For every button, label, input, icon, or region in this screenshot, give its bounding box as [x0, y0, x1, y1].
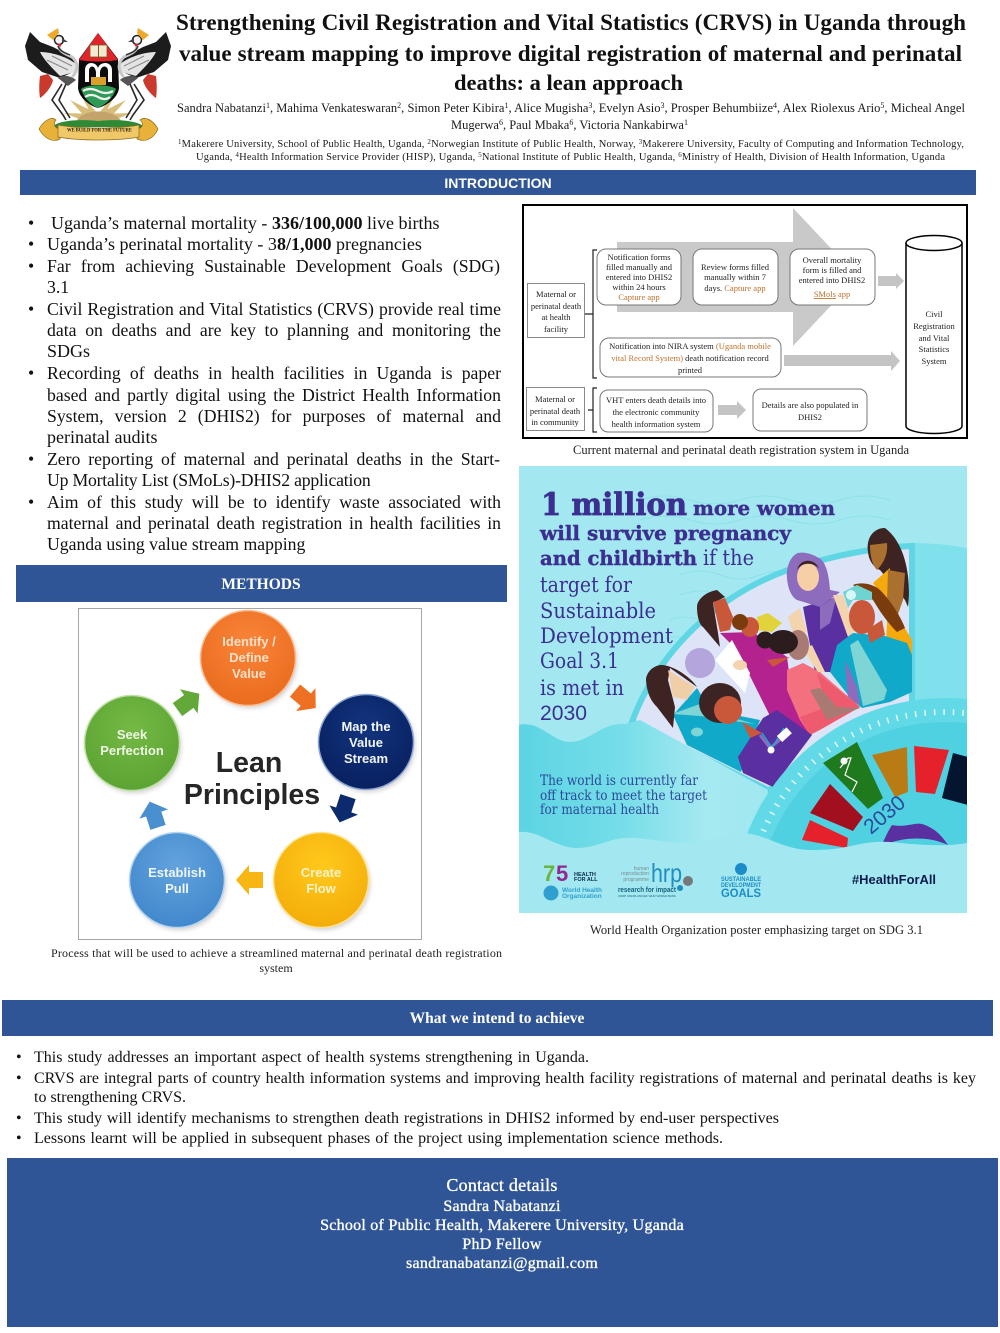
box: notification forms: within 24 hours — [612, 282, 666, 292]
logo: SDG goals: GOALS — [721, 886, 761, 900]
authors: 1 — [684, 118, 688, 127]
box: notification forms: Capture app — [618, 292, 660, 302]
logo: WHO 75: HEALTH — [574, 872, 596, 878]
headline text: more women — [693, 496, 835, 520]
icon: sun rays — [64, 93, 132, 120]
box: overall mortality: form is filled and — [803, 265, 862, 275]
authors: , Paul Mbaka — [503, 118, 570, 132]
text block: introduction bullets: maternal and perinatal death registration in health facilities in — [47, 513, 501, 533]
box: notification forms: Notification forms — [607, 252, 671, 262]
box: facility death: at health — [541, 312, 571, 322]
heading: introduction: INTRODUCTION — [444, 175, 552, 191]
circle: identify define value: Value — [232, 666, 266, 681]
text block: aims bullets: This study addresses an important aspect of health systems strengthening in Uganda. — [34, 1049, 589, 1066]
logo: HRP: human — [634, 866, 649, 872]
text block: aims bullets: CRVS are integral parts of country health information systems and improving health facility registrations of maternal and perinatal deaths is key — [34, 1070, 976, 1087]
box: facility death: Maternal or — [536, 289, 576, 299]
logo: HRP: reproduction — [621, 871, 649, 877]
logo: WHO 75: FOR ALL — [574, 877, 598, 883]
circle: create flow — [274, 832, 370, 930]
woman: orange dress — [868, 528, 912, 668]
box: overall mortality — [790, 249, 875, 305]
authors: , Victoria Nankabirwa — [573, 118, 684, 132]
box: community death: in community — [531, 417, 579, 427]
arrow: VHT to DHIS2 — [718, 401, 746, 419]
headline text — [539, 487, 835, 725]
wave band — [519, 720, 768, 860]
text block: introduction bullets: SDGs — [47, 341, 90, 361]
box: details populated — [753, 389, 867, 431]
text block: introduction bullets — [28, 213, 501, 554]
title: value stream mapping to improve digital registration of maternal and perinatal — [179, 40, 962, 66]
box: NIRA notification — [600, 338, 781, 377]
segment: red — [914, 746, 949, 794]
text block: introduction bullets: • — [28, 213, 34, 233]
affiliations: 6 — [678, 151, 682, 159]
box: notification forms: filled manually and — [606, 262, 673, 272]
logo: WHO 75: Organization — [562, 893, 602, 900]
arrow: NIRA to CRVS — [784, 351, 900, 371]
bracket: community — [588, 388, 597, 432]
text block: introduction bullets: based and partly digital using the District Health Information — [47, 385, 501, 405]
text block: introduction bullets: Zero reporting of maternal and perinatal deaths in the Start- — [47, 449, 500, 469]
box: facility death — [528, 284, 584, 338]
authors: , Micheal Angel — [884, 101, 966, 115]
cylinder: CRVS: System — [921, 356, 947, 366]
icon: arrow green — [169, 682, 208, 722]
box: NIRA notification: printed — [678, 365, 703, 375]
icon: grass — [50, 120, 147, 129]
circle: establish pull: Pull — [165, 881, 189, 896]
caption: WHO poster: World Health Organization poster emphasizing target on SDG 3.1 — [590, 923, 923, 937]
affiliations — [178, 138, 964, 163]
text block: introduction bullets: Far from achieving Sustainable Development Goals (SDG) — [47, 256, 500, 276]
label: lean principles — [184, 747, 320, 811]
text block: introduction bullets: Uganda using value stream mapping — [47, 534, 305, 554]
logo: WHO 75 — [544, 866, 602, 900]
authors: Sandra Nabatanzi — [177, 101, 266, 115]
caption: registration system: Current maternal and perinatal death registration system in Uganda — [573, 443, 909, 457]
cylinder: CRVS — [906, 236, 962, 434]
authors: , Alice Mugisha — [508, 101, 589, 115]
circle: map the value stream: Stream — [344, 751, 388, 766]
authors — [177, 101, 966, 132]
box: community death: perinatal death — [530, 406, 581, 416]
logo: WHO 75: 5 — [556, 861, 568, 886]
arrow: overall to CRVS — [878, 273, 904, 289]
subtext — [540, 774, 707, 814]
box: details populated: Details are also populated in — [762, 400, 859, 410]
panel: contact details: Sandra Nabatanzi — [443, 1198, 561, 1215]
box: review forms — [693, 249, 778, 305]
panel: contact details — [7, 1158, 998, 1327]
title: Strengthening Civil Registration and Vital Statistics (CRVS) in Uganda through — [176, 9, 966, 35]
authors: , Mahima Venkateswaran — [270, 101, 398, 115]
label: lean principles: Principles — [184, 779, 320, 811]
authors: 1 — [504, 101, 508, 110]
panel: contact details: Contact details — [446, 1175, 558, 1195]
affiliations: 2 — [427, 138, 431, 146]
shape: purple swoosh — [883, 824, 948, 845]
logo: HRP — [618, 863, 693, 897]
circle: establish pull — [130, 832, 226, 930]
box: community death — [526, 388, 584, 430]
icon: right crowned crane — [118, 28, 171, 120]
heading: methods — [16, 565, 507, 602]
authors: , Simon Peter Kibira — [401, 101, 505, 115]
circle: create flow: Flow — [306, 881, 337, 896]
illustration: women group — [646, 528, 912, 787]
logo: SDG goals: DEVELOPMENT — [721, 882, 761, 889]
affiliations: 1 — [178, 138, 182, 146]
box: VHT: the electronic community — [613, 407, 700, 417]
circle: map the value stream: Value — [349, 735, 383, 750]
authors: , Evelyn Asio — [592, 101, 660, 115]
authors: 6 — [569, 118, 573, 127]
subtext: for maternal health — [540, 802, 659, 818]
authors: 1 — [266, 101, 270, 110]
logo: HRP: UNDP UNFPA UNICEF WHO WORLD BANK — [618, 894, 676, 898]
headline text: will survive pregnancy — [539, 521, 792, 545]
heading: what we intend to achieve: What we intend to achieve — [410, 1010, 585, 1027]
circle: identify define value: Define — [229, 650, 269, 665]
circle: map the value stream — [318, 694, 415, 792]
authors: 2 — [397, 101, 401, 110]
headline text: if the — [703, 546, 754, 570]
segment: red — [802, 820, 848, 848]
segment: ochre — [872, 747, 908, 797]
text block: introduction bullets: data on deaths and are key to planning and monitoring the — [47, 320, 501, 340]
authors: , Alex Riolexus Ario — [777, 101, 880, 115]
gauge dial — [748, 698, 967, 850]
affiliations: Health Information Service Provider (HISP), Uganda, — [239, 152, 478, 163]
affiliations: 5 — [478, 151, 482, 159]
icon: motto scroll — [39, 118, 158, 140]
affiliations: 3 — [639, 138, 643, 146]
text block: introduction bullets: Civil Registration and Vital Statistics (CRVS) provide real time — [47, 299, 501, 319]
woman: purple hijab — [787, 553, 855, 672]
text block: introduction bullets: 3.1 — [47, 277, 69, 297]
cylinder: CRVS: and Vital — [919, 333, 950, 343]
panel: contact details: School of Public Health, Makerere University, Uganda — [320, 1217, 684, 1234]
segment: dark red — [810, 784, 863, 831]
icon: arrow yellow — [236, 865, 263, 895]
headline text: Goal 3.1 — [540, 649, 619, 673]
panel: contact details: sandranabatanzi@gmail.com — [406, 1255, 598, 1272]
label: lean principles: Lean — [216, 747, 282, 779]
cylinder: CRVS: Statistics — [919, 344, 949, 354]
affiliations: National Institute of Public Health, Uganda, — [482, 152, 678, 163]
logo: HRP: hrp — [651, 858, 682, 888]
caption: lean process: Process that will be used to achieve a streamlined maternal and perinatal death registration — [51, 946, 502, 960]
text block: aims bullets: • — [16, 1070, 22, 1087]
text block: introduction bullets: • — [28, 299, 34, 319]
text block: introduction bullets: • — [28, 234, 34, 254]
heading: what we intend to achieve — [2, 1000, 993, 1036]
headline text: 2030 — [540, 702, 587, 725]
box: NIRA notification: vital Record System) death notification record — [611, 353, 769, 363]
text block: introduction bullets: System, version 2 (DHIS2) for purposes of maternal and — [47, 406, 501, 426]
text block: introduction bullets: Uganda’s maternal mortality - 336/100,000 live births — [51, 213, 439, 233]
box: overall mortality: SMols app — [814, 289, 850, 299]
affiliations: 4 — [235, 151, 239, 159]
text block: aims bullets: This study will identify mechanisms to strengthen death registrations in DHIS2 informed by end-user perspectives — [34, 1110, 779, 1127]
box: community death: Maternal or — [535, 394, 575, 404]
affiliations: Ministry of Health, Division of Health Information, Uganda — [682, 152, 945, 163]
arrow: big grey process arrow — [617, 208, 858, 346]
text block: aims bullets: to strengthening CRVS. — [34, 1089, 186, 1106]
box: notification forms — [597, 249, 681, 305]
icon: arrow navy — [325, 792, 362, 827]
woman: coral dress — [756, 630, 860, 735]
box: facility death: facility — [544, 324, 569, 334]
woman: nurse — [830, 583, 912, 708]
poster: WHO SDG 3.1 — [519, 466, 967, 913]
segment: green heartbeat — [823, 742, 883, 809]
text block: aims bullets: • — [16, 1110, 22, 1127]
text block: introduction bullets: perinatal audits — [47, 427, 157, 447]
text block: aims bullets: • — [16, 1049, 22, 1066]
headline text: 1 million — [541, 487, 687, 523]
text block: introduction bullets: • — [28, 363, 34, 383]
text block: introduction bullets: Uganda’s perinatal mortality - 38/1,000 pregnancies — [47, 234, 422, 254]
caption: lean process: system — [259, 961, 293, 975]
icon: left crowned crane — [25, 28, 78, 120]
authors: 4 — [773, 101, 777, 110]
title: deaths: a lean approach — [454, 70, 683, 95]
affiliations: Norwegian Institute of Public Health, Norway, — [431, 139, 638, 150]
headline text: and childbirth — [540, 546, 697, 570]
hashtag: #HealthForAll — [852, 873, 936, 887]
diagram: lean principles — [78, 608, 422, 940]
circle: seek perfection — [84, 696, 181, 793]
box: VHT: health information system — [612, 419, 701, 429]
figure: doctor — [699, 683, 812, 787]
authors: Mugerwa — [451, 118, 499, 132]
flow diagram: registration system — [523, 205, 967, 438]
text block: introduction bullets: • — [28, 256, 34, 276]
caption: lean process — [51, 946, 502, 975]
title — [176, 9, 966, 95]
text block: aims bullets: • — [16, 1130, 22, 1147]
circle: create flow: Create — [301, 865, 341, 880]
woman: magenta with baby — [685, 590, 812, 735]
logo: Makerere University crest — [25, 28, 171, 140]
heading: methods: METHODS — [221, 576, 301, 593]
logo: SDG goals — [721, 863, 762, 900]
bottom wave — [519, 832, 967, 913]
icon: arrow orange — [285, 679, 325, 719]
box: overall mortality: Overall mortality — [803, 255, 862, 265]
authors: 3 — [588, 101, 592, 110]
heading: introduction — [20, 170, 976, 195]
box: NIRA notification: Notification into NIRA system (Uganda mobile — [609, 341, 771, 351]
cylinder: CRVS: Registration — [913, 321, 956, 331]
circle: seek perfection: Perfection — [100, 743, 164, 758]
box: review forms: Review forms filled — [701, 262, 770, 272]
cylinder: CRVS: Civil — [925, 309, 943, 319]
fan background — [632, 543, 967, 790]
affiliations: Makerere University, School of Public Health, Uganda, — [182, 139, 427, 150]
box: overall mortality: entered into DHIS2 — [799, 275, 865, 285]
label: 2030: 2030 — [859, 791, 910, 839]
box: review forms: manually within 7 — [704, 272, 766, 282]
authors: 5 — [880, 101, 884, 110]
segment: navy — [942, 753, 968, 805]
box: facility death: perinatal death — [531, 301, 582, 311]
authors: 6 — [499, 118, 503, 127]
box: VHT — [600, 390, 713, 432]
bracket: facility — [585, 250, 597, 378]
headline text: is met in — [540, 676, 624, 700]
text block: introduction bullets: • — [28, 449, 34, 469]
logo: SDG goals: SUSTAINABLE — [721, 876, 762, 883]
circle: establish pull: Establish — [148, 865, 206, 880]
text block: introduction bullets: Aim of this study will be to identify waste associated with — [47, 492, 501, 512]
panel: contact details: PhD Fellow — [462, 1236, 542, 1253]
affiliations: Uganda, — [196, 152, 232, 163]
box: VHT: VHT enters death details into — [606, 395, 706, 405]
text block: introduction bullets: Recording of deaths in health facilities in Uganda is paper — [47, 363, 501, 383]
icon: shield — [78, 33, 119, 108]
logo: HRP: programme — [623, 877, 649, 883]
logo: WHO 75: 7 — [543, 861, 555, 886]
authors: , Prosper Behumbiize — [665, 101, 773, 115]
box: review forms: days. Capture app — [704, 283, 766, 293]
authors: 3 — [660, 101, 664, 110]
text block: aims bullets — [16, 1049, 976, 1147]
box: details populated: DHIS2 — [798, 412, 822, 422]
icon: arrow blue — [135, 797, 172, 832]
subtext: The world is currently far — [540, 773, 698, 789]
affiliations: Makerere University, Faculty of Computing and Information Technology, — [642, 139, 964, 150]
headline text: target for — [540, 573, 633, 597]
headline text: Sustainable — [540, 599, 656, 623]
headline text: Development — [540, 624, 674, 648]
woman: lower left — [646, 665, 760, 772]
circle: map the value stream: Map the — [341, 719, 391, 734]
logo: HRP: research for impact — [618, 887, 677, 894]
logo: WHO 75: World Health — [562, 887, 602, 894]
icon: motto scroll: WE BUILD FOR THE FUTURE — [67, 128, 132, 134]
text block: introduction bullets: • — [28, 492, 34, 512]
circle: identify define value: Identify / — [222, 634, 276, 649]
subtext: off track to meet the target — [540, 788, 708, 804]
box: notification forms: entered into DHIS2 — [606, 272, 672, 282]
text block: aims bullets: Lessons learnt will be applied in subsequent phases of the project using implementation science methods. — [34, 1130, 723, 1147]
circle: seek perfection: Seek — [117, 727, 148, 742]
circle: identify define value — [200, 610, 297, 708]
text block: introduction bullets: Up Mortality List (SMoLs)-DHIS2 application — [47, 470, 370, 490]
